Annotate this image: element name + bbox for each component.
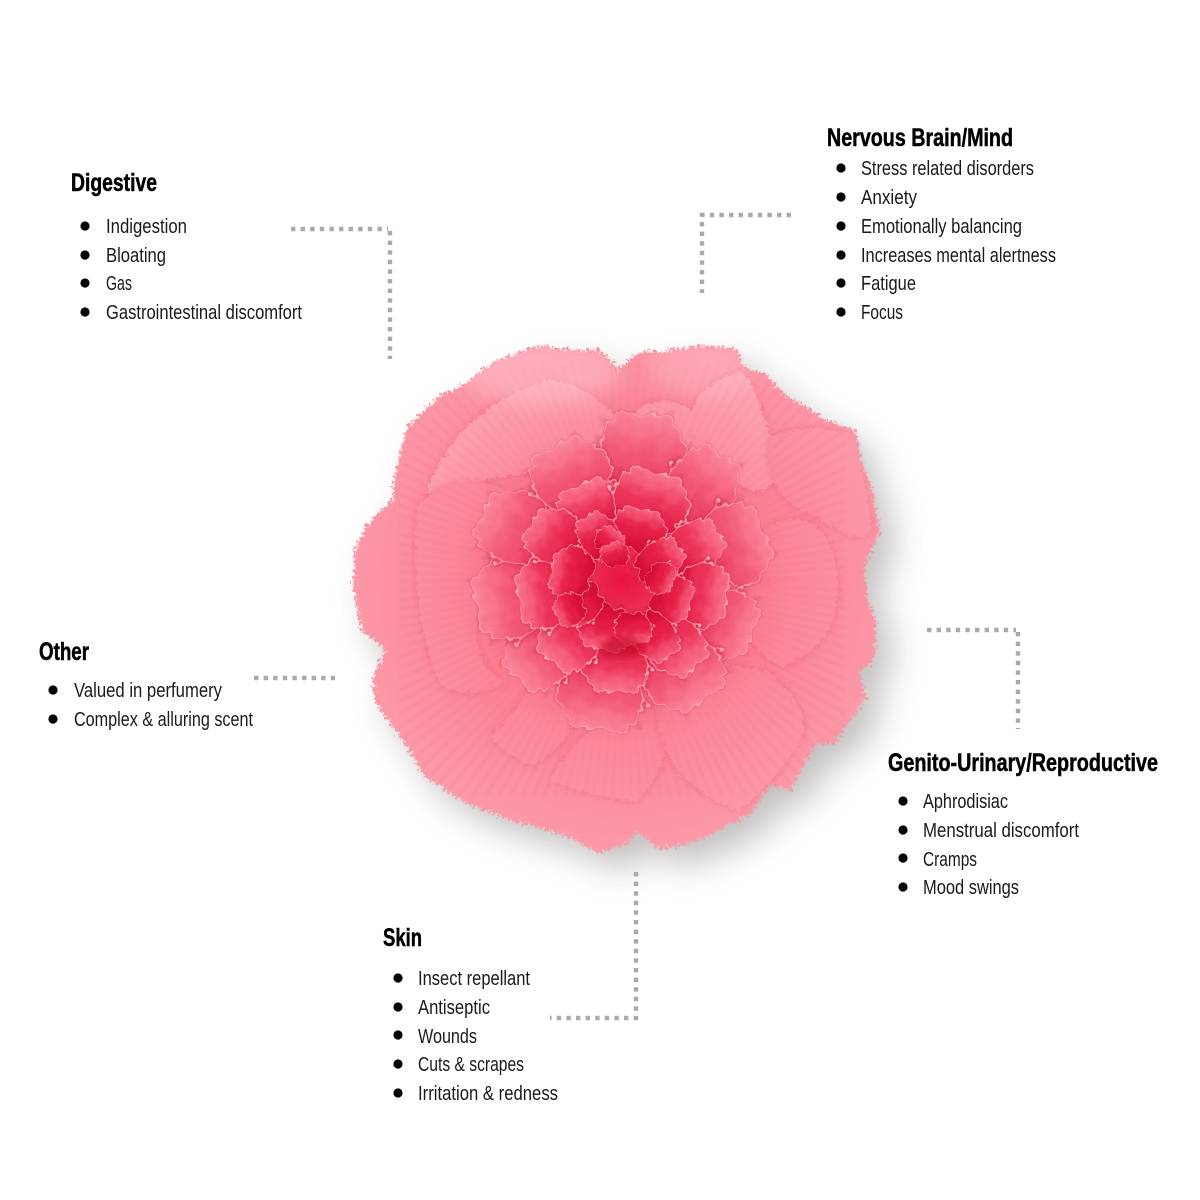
panel: digestive: [71, 169, 302, 324]
panel: skin: [383, 924, 558, 1105]
list: nervous: Fatigue: [861, 273, 916, 295]
list: nervous: [836, 158, 1056, 324]
heading: other: Other: [39, 638, 89, 666]
list: genito-urinary: Mood swings: [923, 877, 1019, 899]
list: skin: [393, 968, 558, 1105]
list: digestive: Gas: [106, 273, 132, 295]
outer petals: [415, 372, 872, 812]
list: skin: Insect repellant: [418, 968, 530, 990]
carnation flower illustration: [354, 341, 895, 869]
list: genito-urinary: Aphrodisiac: [923, 791, 1008, 813]
flower core ruffles: [465, 408, 781, 737]
connector: other: [254, 676, 335, 680]
radial petal striations: [436, 341, 808, 760]
panel: nervous brain/mind: [827, 124, 1056, 324]
list: skin: Cuts & scrapes: [418, 1054, 524, 1076]
list: nervous: Focus: [861, 302, 903, 324]
list: digestive: Indigestion: [106, 216, 187, 238]
panel: genito-urinary/reproductive: [888, 749, 1158, 899]
panel: other: [39, 638, 253, 731]
list: other: Valued in perfumery: [74, 680, 222, 702]
connector: digestive: [291, 229, 390, 359]
list: other: Complex & alluring scent: [74, 709, 253, 731]
list: digestive: [80, 216, 302, 324]
list: other: [48, 680, 253, 731]
connector: nervous: [702, 215, 791, 293]
connector: genito-urinary: [927, 630, 1018, 729]
heading: nervous: Nervous Brain/Mind: [827, 124, 1013, 152]
list: digestive: Gastrointestinal discomfort: [106, 302, 302, 324]
list: nervous: Emotionally balancing: [861, 216, 1022, 238]
list: skin: Irritation & redness: [418, 1083, 558, 1105]
list: skin: Wounds: [418, 1026, 477, 1048]
list: digestive: Bloating: [106, 245, 166, 267]
list: genito-urinary: Menstrual discomfort: [923, 820, 1079, 842]
list: genito-urinary: Cramps: [923, 849, 977, 871]
list: skin: Antiseptic: [418, 997, 490, 1019]
heading: skin: Skin: [383, 924, 422, 952]
list: nervous: Increases mental alertness: [861, 245, 1056, 267]
flower soft shadow: [370, 363, 895, 869]
heading: digestive: Digestive: [71, 169, 157, 197]
list: nervous: Anxiety: [861, 187, 917, 209]
flower base silhouette: [354, 346, 879, 852]
connector: skin: [550, 872, 636, 1018]
list: nervous: Stress related disorders: [861, 158, 1034, 180]
list: genito-urinary: [898, 791, 1079, 899]
